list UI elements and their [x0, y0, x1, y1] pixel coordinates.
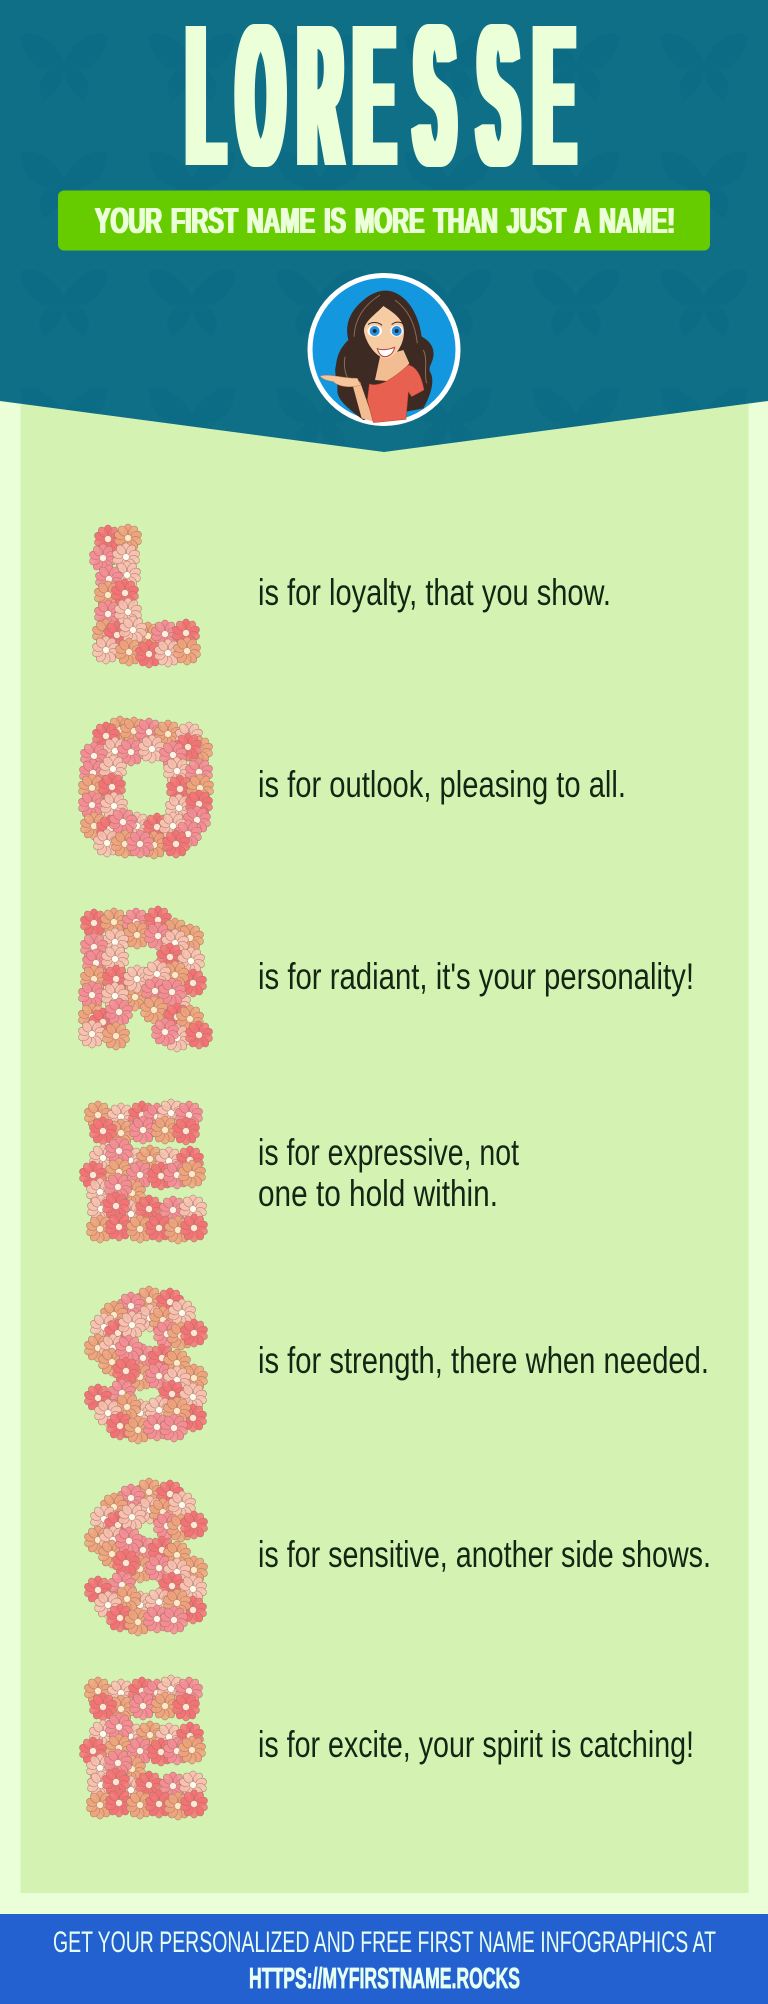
header banner	[0, 0, 768, 452]
icon: woman portrait	[310, 276, 458, 424]
footer	[0, 1914, 768, 2004]
text: O line: is for outlook, pleasing to all.	[258, 764, 626, 805]
flower letter E	[78, 1099, 209, 1244]
text: E line: is for expressive, not	[258, 1132, 520, 1173]
footer: HTTPS://MYFIRSTNAME.ROCKS	[249, 1963, 520, 1995]
content panel	[20, 380, 748, 1893]
flower letter E second	[78, 1675, 209, 1820]
flower letter L	[88, 524, 202, 668]
flower letter S second	[83, 1478, 209, 1636]
text: E line	[258, 1132, 520, 1214]
flower letter R	[77, 906, 214, 1052]
flower letter O	[77, 716, 215, 859]
flower letter S	[83, 1286, 209, 1444]
text: L line: is for loyalty, that you show.	[258, 572, 611, 613]
subtitle banner	[58, 190, 710, 250]
text: E line: one to hold within.	[258, 1173, 498, 1214]
